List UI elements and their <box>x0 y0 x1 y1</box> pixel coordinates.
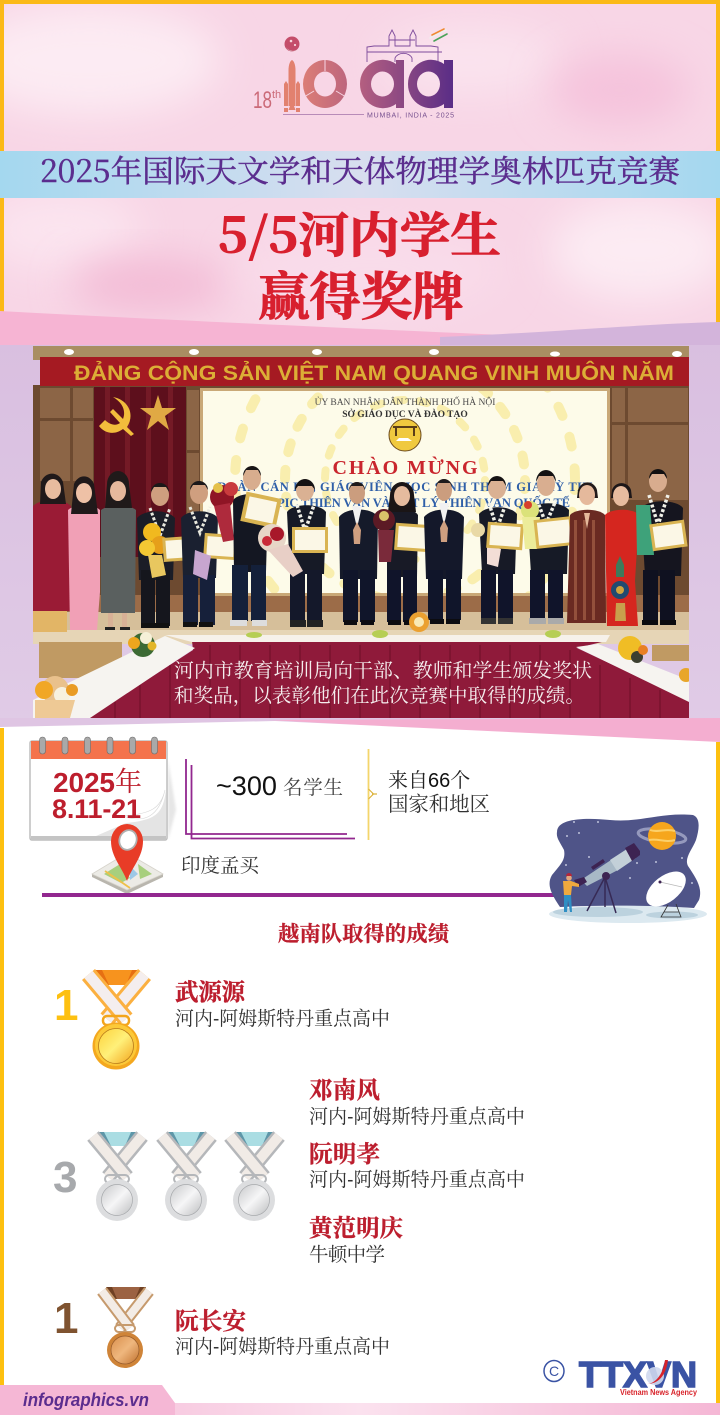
countries stat: 来自66个 <box>388 764 470 793</box>
lower wave divider <box>0 718 720 745</box>
heading band: 2025年国际天文学和天体物理学奥林匹克竞赛 <box>40 147 681 191</box>
footer tab: infographics.vn <box>0 1385 175 1415</box>
gold row: 1 <box>54 981 78 1030</box>
person 12: boy with yellow bouquet <box>521 470 574 624</box>
main title: 赢得奖牌 <box>258 256 464 330</box>
planet with ring <box>637 822 687 850</box>
yellow frame sides <box>0 728 720 1407</box>
person 4: man with sunflower bouquet <box>137 483 182 628</box>
white content area <box>0 721 720 1415</box>
header wave <box>0 311 720 345</box>
silver row: 牛顿中学 <box>309 1244 385 1266</box>
main title <box>218 197 501 330</box>
person 7: boy with white-red bouquet <box>258 479 328 627</box>
person 13: woman in brown ao dai <box>567 482 606 623</box>
table with red skirt <box>33 635 689 718</box>
calendar date: 2025 <box>53 767 115 798</box>
gold row: 武源源 <box>175 973 246 1007</box>
yellow frame top <box>0 0 720 325</box>
TTXVN wordmark: TTXVN <box>579 1354 697 1395</box>
calendar rings <box>40 737 158 754</box>
backdrop screen: ĐOÀN CÁN BỘ, GIÁO VIÊN, HỌC SINH THAM GIA KỲ THI <box>218 480 593 494</box>
students stat <box>186 759 355 838</box>
person 10: man in dark suit <box>424 479 464 624</box>
bronze medal <box>102 1287 149 1368</box>
silver medal 1 <box>93 1132 142 1221</box>
backdrop screen: OLYMPIC THIÊN VĂN VÀ VẬT LÝ THIÊN VĂN QUỐC TẾ <box>240 495 570 510</box>
person 9: girl with dark bouquet <box>373 482 426 625</box>
silver medal 3 <box>230 1132 279 1221</box>
logo letter a second <box>408 60 453 108</box>
photo: award ceremony <box>33 310 693 718</box>
calendar icon <box>30 737 176 840</box>
18th: 18 <box>253 87 272 114</box>
flower arrangements <box>35 612 693 718</box>
silver row: 黄范明庆 <box>309 1209 403 1243</box>
ceiling <box>33 346 689 360</box>
double L frame <box>186 759 355 838</box>
person 8: man in dark suit <box>339 482 378 625</box>
students stat: ~300 <box>216 771 277 801</box>
logo letter o <box>303 60 347 108</box>
copyright and TTXVN logo: Vietnam News Agency <box>620 1387 697 1397</box>
party flag <box>94 387 186 557</box>
telescope illustration <box>549 814 707 923</box>
backdrop screen: ỦY BAN NHÂN DÂN THÀNH PHỐ HÀ NỘI <box>315 395 495 408</box>
night sky blob <box>550 814 700 908</box>
section heading: 越南队取得的成绩 <box>278 917 450 948</box>
lavender photo backing <box>0 340 720 725</box>
gold medal <box>88 970 144 1070</box>
main title: 5/5河内学生 <box>218 197 501 266</box>
person 14: woman in red ao dai <box>605 483 639 626</box>
top pink watercolor background <box>0 0 720 345</box>
wood wall <box>33 385 689 615</box>
silver row: 河内-阿姆斯特丹重点高中 <box>309 1169 525 1191</box>
silver row: 3 <box>53 1153 77 1202</box>
logo letter i as rocket <box>284 60 300 112</box>
logo: 18th IOAA Mumbai: th <box>272 89 281 101</box>
person 6: tall boy with red bouquet <box>210 466 282 626</box>
footer tab: infographics.vn: infographics.vn <box>23 1390 149 1410</box>
copyright symbol: C <box>549 1363 559 1379</box>
banner: ĐẢNG CỘNG SẢN VIỆT NAM QUANG VINH MUÔN NĂM <box>74 361 674 385</box>
copyright symbol <box>544 1360 564 1382</box>
calendar date: 年 <box>115 760 142 799</box>
copyright and TTXVN logo <box>544 1354 697 1397</box>
logo: 18th IOAA Mumbai <box>253 29 454 120</box>
ground <box>549 905 707 923</box>
bronze row: 河内-阿姆斯特丹重点高中 <box>175 1336 390 1358</box>
silver medal 2 <box>162 1132 211 1221</box>
wainscot and stage floor <box>33 595 689 644</box>
astronomer <box>563 873 579 912</box>
backdrop screen: SỞ GIÁO DỤC VÀ ĐÀO TẠO <box>342 408 468 420</box>
purple divider <box>42 893 557 897</box>
silver row: 阮明孝 <box>309 1135 380 1169</box>
footer strip <box>0 1403 720 1415</box>
location text: 印度孟买 <box>181 850 259 878</box>
person 1: woman in red <box>33 474 72 632</box>
location pin and map icon <box>92 824 163 894</box>
logo tricolor flag strokes <box>430 29 447 41</box>
countries stat <box>368 749 490 840</box>
stars <box>565 821 693 884</box>
logo planet <box>284 36 300 52</box>
calendar date: 8.11-21 <box>52 794 141 824</box>
calendar date <box>52 760 142 824</box>
countries stat: 国家和地区 <box>388 787 490 817</box>
backdrop screen <box>200 388 610 596</box>
silver row <box>53 1071 525 1266</box>
logo letter a <box>360 60 404 108</box>
person 11: boy with certificate <box>471 476 524 624</box>
person 3: woman in grey <box>101 471 136 630</box>
logo location text: MUMBAI, INDIA - 2025 <box>367 112 454 120</box>
person 5: man with certificate <box>181 481 238 627</box>
front desks <box>39 642 689 678</box>
bronze row <box>54 1287 390 1368</box>
bronze row: 阮长安 <box>175 1302 248 1336</box>
photo caption <box>174 660 592 706</box>
person 15: man with green bouquet <box>636 469 688 625</box>
person 2: woman in pink <box>68 476 100 630</box>
logo gateway outline <box>367 30 442 62</box>
gold row <box>54 970 390 1070</box>
telescope <box>574 843 640 913</box>
radar dish <box>640 865 692 917</box>
gold row: 河内-阿姆斯特丹重点高中 <box>175 1008 390 1030</box>
photo caption: 和奖品，以表彰他们在此次竞赛中取得的成绩。 <box>174 680 585 708</box>
students stat: 名学生 <box>283 772 343 800</box>
silver row: 邓南风 <box>309 1071 380 1105</box>
silver row: 河内-阿姆斯特丹重点高中 <box>309 1106 525 1128</box>
photo caption: 河内市教育培训局向干部、教师和学生颁发奖状 <box>174 655 592 683</box>
bronze row: 1 <box>54 1294 78 1343</box>
banner <box>40 357 689 386</box>
backdrop screen: CHÀO MỪNG <box>332 455 478 479</box>
